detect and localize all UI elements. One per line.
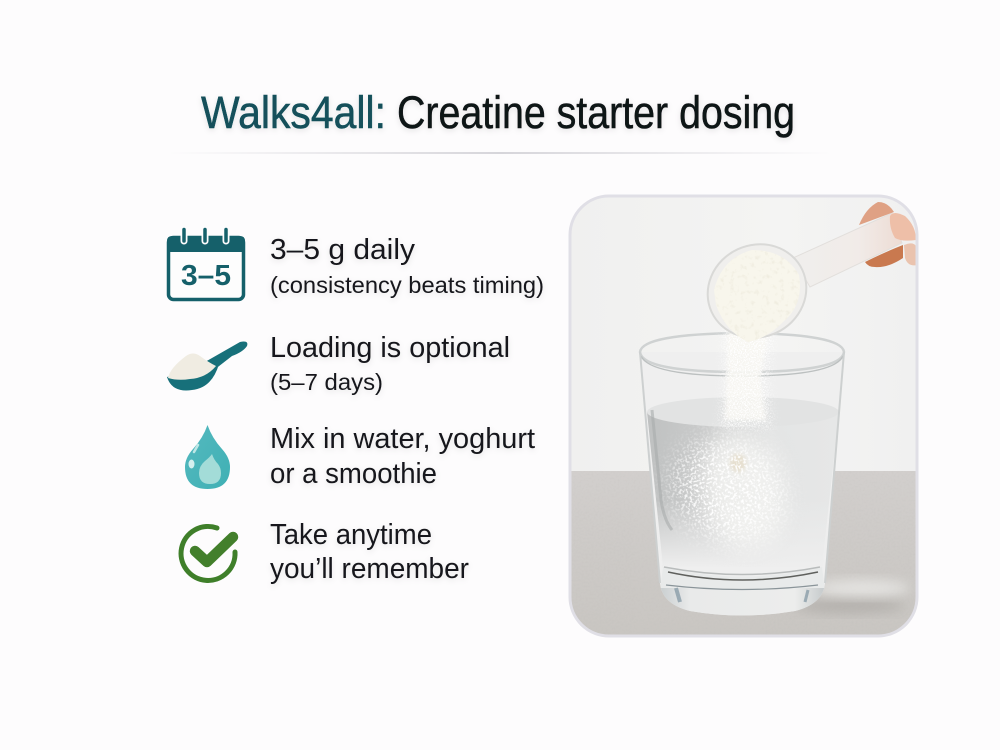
powder stream <box>720 330 773 428</box>
item: loading <box>167 332 510 395</box>
glass <box>640 333 844 618</box>
text: 3–5 g daily: (consistency beats timing) <box>270 272 544 298</box>
text: take anytime: Take anytime <box>270 519 432 551</box>
photo border <box>570 196 917 636</box>
item: timing <box>181 519 469 585</box>
text: take anytime: you’ll remember <box>270 553 469 585</box>
text: 3–5 g daily <box>270 234 544 298</box>
title <box>201 87 795 138</box>
title: Creatine starter dosing <box>397 87 795 138</box>
text: loading is optional: (5–7 days) <box>270 369 383 395</box>
glass shadow <box>795 580 910 613</box>
icon: calendar 3–5 <box>167 230 245 300</box>
wall and table <box>569 195 919 637</box>
hand holding scoop <box>859 202 917 267</box>
text: take anytime <box>270 519 469 585</box>
icon: water drop <box>185 425 230 489</box>
measuring scoop <box>706 212 902 338</box>
text: loading is optional <box>270 332 510 395</box>
text: mix in water <box>270 423 535 490</box>
panel: photo of powder poured into water glass <box>569 195 919 637</box>
icon: calendar 3–5: 3–5 <box>181 260 231 292</box>
item: daily dose <box>167 230 544 300</box>
text: loading is optional: Loading is optional <box>270 332 510 364</box>
icon: check mark <box>181 526 235 580</box>
powder in scoop <box>714 250 800 342</box>
text: mix in water: or a smoothie <box>270 458 437 490</box>
icon: scoop of powder <box>167 342 247 390</box>
text: 3–5 g daily: 3–5 g daily <box>270 234 416 266</box>
text: mix in water: Mix in water, yoghurt <box>270 423 535 455</box>
item: mixing <box>185 423 535 490</box>
title: Walks4all: <box>201 87 386 138</box>
